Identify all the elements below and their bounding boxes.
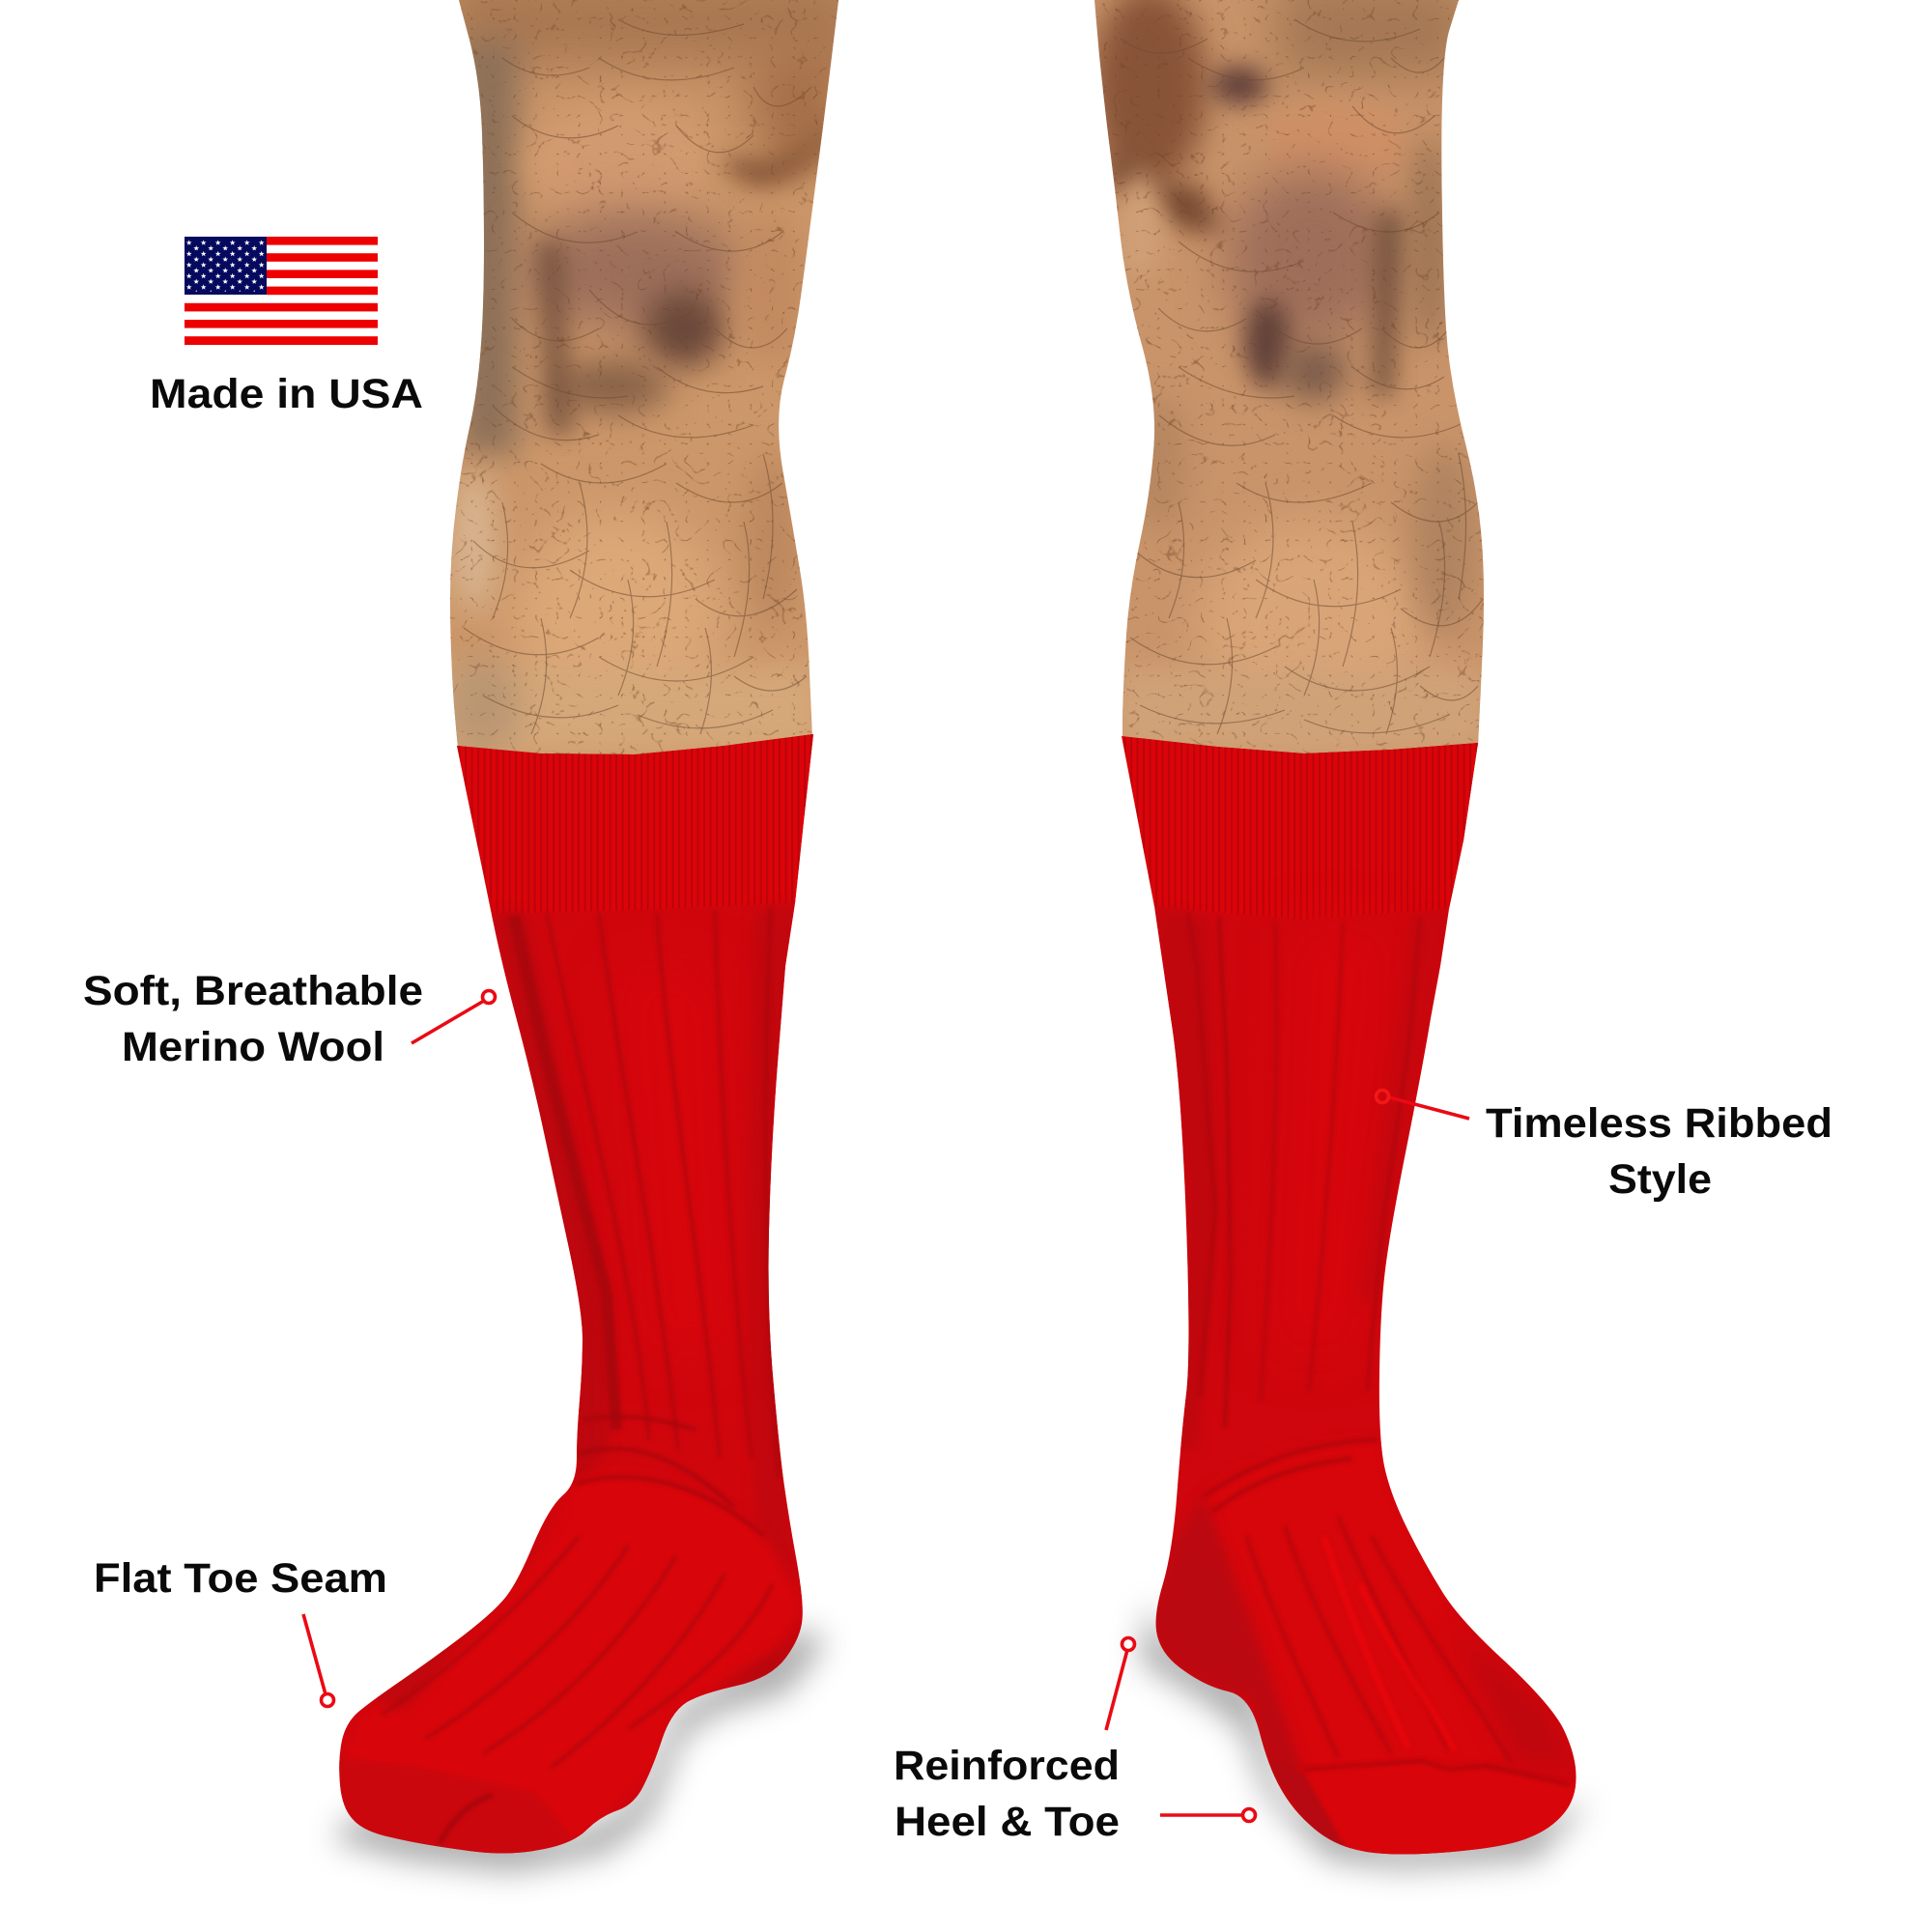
callout marker: toe bbox=[1160, 1808, 1256, 1822]
ribbed cuff bbox=[449, 724, 821, 914]
calf rib lines bbox=[1188, 913, 1420, 1428]
heel bbox=[1150, 1496, 1304, 1787]
foot bbox=[1381, 1441, 1577, 1773]
foot bbox=[338, 1475, 804, 1844]
individual hairs: left leg bbox=[464, 19, 811, 734]
left leg bbox=[450, 0, 838, 754]
hair texture: right leg bbox=[1082, 0, 1497, 773]
label: Timeless Ribbed Style bbox=[1486, 1100, 1833, 1203]
toe bbox=[339, 1754, 574, 1853]
label: Reinforced Heel & Toe bbox=[894, 1743, 1120, 1845]
ankle creases bbox=[1204, 1439, 1377, 1512]
callout marker: merino wool bbox=[412, 991, 495, 1043]
label: Soft, Breathable Merino Wool bbox=[83, 968, 423, 1070]
hair texture: left leg bbox=[450, 0, 838, 754]
foot rib lines bbox=[382, 1536, 773, 1768]
label: Reinforced Heel & Toe: Heel & Toe bbox=[895, 1799, 1120, 1845]
label: Timeless Ribbed Style: Style bbox=[1608, 1156, 1712, 1203]
label: Made in USA: Made in USA bbox=[150, 371, 423, 417]
label: Soft, Breathable Merino Wool: Merino Wool bbox=[122, 1024, 384, 1070]
ribbed cuff bbox=[1111, 729, 1488, 920]
skin shading: left leg bbox=[435, 0, 860, 753]
skin shading: right leg bbox=[1092, 0, 1488, 753]
individual hairs: right leg bbox=[1121, 19, 1483, 734]
calf shading bbox=[1154, 908, 1449, 1449]
label: Soft, Breathable Merino Wool: Soft, Breathable bbox=[83, 968, 423, 1014]
calf shading bbox=[493, 903, 802, 1642]
right leg bbox=[1082, 0, 1497, 773]
label: Flat Toe Seam: Flat Toe Seam bbox=[94, 1555, 387, 1602]
label: Timeless Ribbed Style: Timeless Ribbed bbox=[1486, 1100, 1833, 1147]
toe bbox=[1289, 1767, 1577, 1855]
floor shadows under feet bbox=[333, 1604, 1589, 1872]
callout marker: heel bbox=[1106, 1638, 1134, 1730]
callout marker: toe seam bbox=[303, 1614, 334, 1706]
calf rib lines bbox=[514, 906, 779, 1478]
label: Reinforced Heel & Toe: Reinforced bbox=[894, 1743, 1120, 1789]
foot rib lines bbox=[1246, 1517, 1512, 1763]
callout marker: ribbed style bbox=[1376, 1090, 1469, 1119]
left sock bbox=[328, 724, 831, 1884]
icon: American flag bbox=[185, 237, 378, 345]
ankle creases bbox=[577, 1416, 764, 1536]
right sock bbox=[1111, 724, 1594, 1884]
